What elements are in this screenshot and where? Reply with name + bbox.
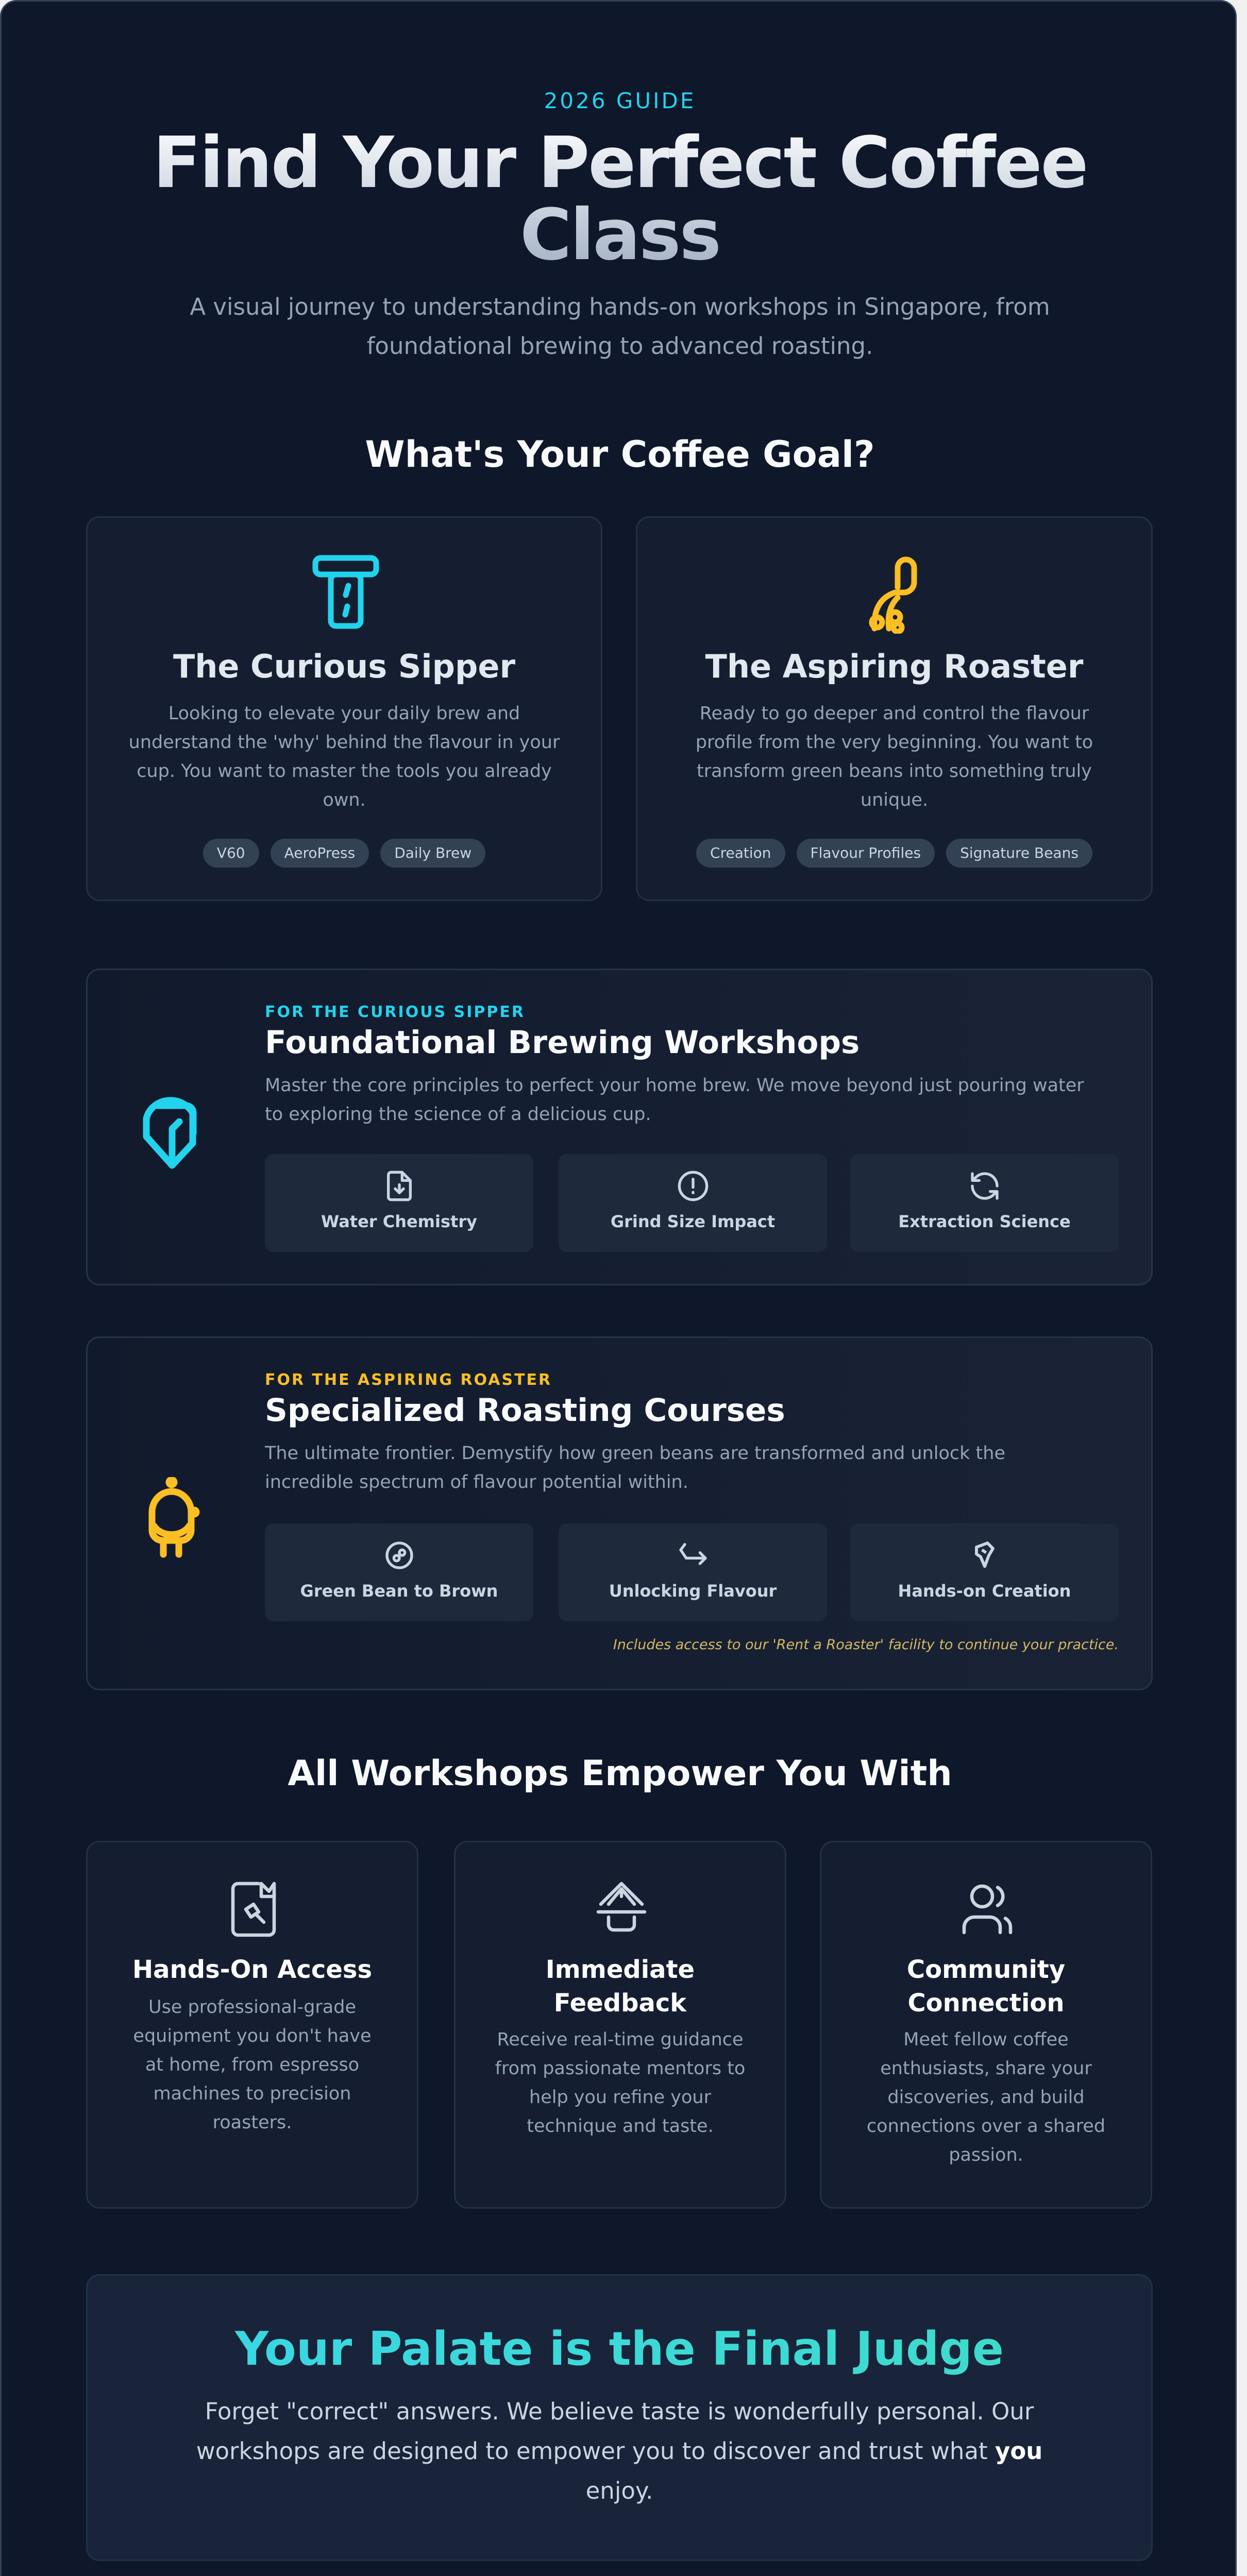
sub-card: green bean: Green Bean to Brown [300, 1581, 498, 1601]
tags: Signature Beans [960, 844, 1079, 861]
sub-card: extraction [850, 1154, 1119, 1252]
benefit: hands-on access [86, 1841, 418, 2209]
sub-card: grind size: Grind Size Impact [611, 1212, 775, 1231]
icon: roaster [869, 556, 917, 634]
benefit: community connection: Connection [907, 1989, 1065, 2018]
panel: curious sipper [86, 516, 602, 901]
callout: palate [86, 2274, 1153, 2561]
panel: specialized roasting courses [86, 1336, 1153, 1690]
icon: people [963, 1885, 1012, 1934]
description: The ultimate frontier. Demystify how green beans are transformed and unlock the incredible spectrum of flavour potential within. [265, 1443, 1005, 1493]
heading: Specialized Roasting Courses [265, 1392, 785, 1429]
callout title: Your Palate is the Final Judge [235, 2322, 1004, 2376]
card title: The Curious Sipper [173, 648, 515, 685]
sub-card: unlocking flavour [559, 1523, 827, 1621]
heading: goal: What's Your Coffee Goal? [365, 433, 875, 476]
benefit: immediate feedback: Feedback [554, 1989, 686, 2018]
card description: Looking to elevate your daily brew and understand the 'why' behind the flavour in your cup. You want to master the tools you already own. [129, 703, 560, 810]
icon: equipment [231, 1882, 276, 1937]
sub-card: extraction: Extraction Science [898, 1212, 1071, 1231]
tags: AeroPress [284, 844, 355, 861]
tags [696, 839, 1092, 868]
heading: empower: All Workshops Empower You With [288, 1753, 952, 1794]
benefit: immediate feedback: Immediate [546, 1955, 695, 1984]
title: Find Your Perfect Coffee [153, 122, 1087, 204]
benefit: community connection: Community [907, 1955, 1065, 1984]
title [2, 127, 1238, 272]
description: Master the core principles to perfect your home brew. We move beyond just pouring water to exploring the science of a delicious cup. [265, 1075, 1084, 1125]
benefit: immediate feedback: Receive real-time guidance from passionate mentors to help you refine your technique and taste. [495, 2029, 745, 2137]
tags [203, 839, 485, 868]
label: FOR THE ASPIRING ROASTER [265, 1371, 552, 1389]
icon: pour-over pin [143, 1097, 197, 1168]
eyebrow: 2026 guide: 2026 GUIDE [544, 88, 696, 113]
note: Includes access to our 'Rent a Roaster' facility to continue your practice. [613, 1637, 1119, 1653]
tags: Flavour Profiles [810, 844, 921, 861]
icon: feedback [597, 1882, 646, 1932]
card description: Ready to go deeper and control the flavour profile from the very beginning. You want to transform green beans into something truly unique. [696, 703, 1093, 810]
sub-card: hands-on creation [850, 1523, 1119, 1621]
sub-card: water chemistry: Water Chemistry [321, 1212, 477, 1231]
label: FOR THE CURIOUS SIPPER [265, 1003, 525, 1021]
tags: Creation [710, 844, 771, 861]
sub-card: grind size [559, 1154, 827, 1252]
benefit: immediate feedback [454, 1841, 786, 2209]
card title: The Aspiring Roaster [705, 648, 1083, 685]
title: Class [520, 194, 720, 276]
benefit: hands-on access: Use professional-grade equipment you don't have at home, from espresso machines to precision roasters. [133, 1997, 372, 2133]
callout text: Forget "correct" answers. We believe taste is wonderfully personal. Our workshops are designed to empower you to discover and trust what you enjoy. [196, 2398, 1042, 2504]
icon: dripper [312, 555, 379, 629]
benefit: hands-on access: Hands-On Access [132, 1955, 372, 1984]
panel: foundational brewing workshops [86, 969, 1153, 1285]
benefit: community connection: Meet fellow coffee enthusiasts, share your discoveries, and build connections over a shared passion. [867, 2029, 1105, 2165]
icon: roaster drum [148, 1477, 200, 1558]
sub-card: water chemistry [265, 1154, 533, 1252]
panel: aspiring roaster [636, 516, 1153, 901]
benefit: community connection [820, 1841, 1152, 2209]
sub-card: unlocking flavour: Unlocking Flavour [609, 1581, 777, 1601]
sub-card: green bean [265, 1523, 533, 1621]
tags: V60 [217, 844, 245, 861]
sub-card: hands-on creation: Hands-on Creation [898, 1581, 1071, 1601]
subtitle: A visual journey to understanding hands-on workshops in Singapore, from foundational brewing to advanced roasting. [190, 293, 1050, 360]
heading: Foundational Brewing Workshops [265, 1024, 860, 1061]
tags: Daily Brew [394, 844, 471, 861]
